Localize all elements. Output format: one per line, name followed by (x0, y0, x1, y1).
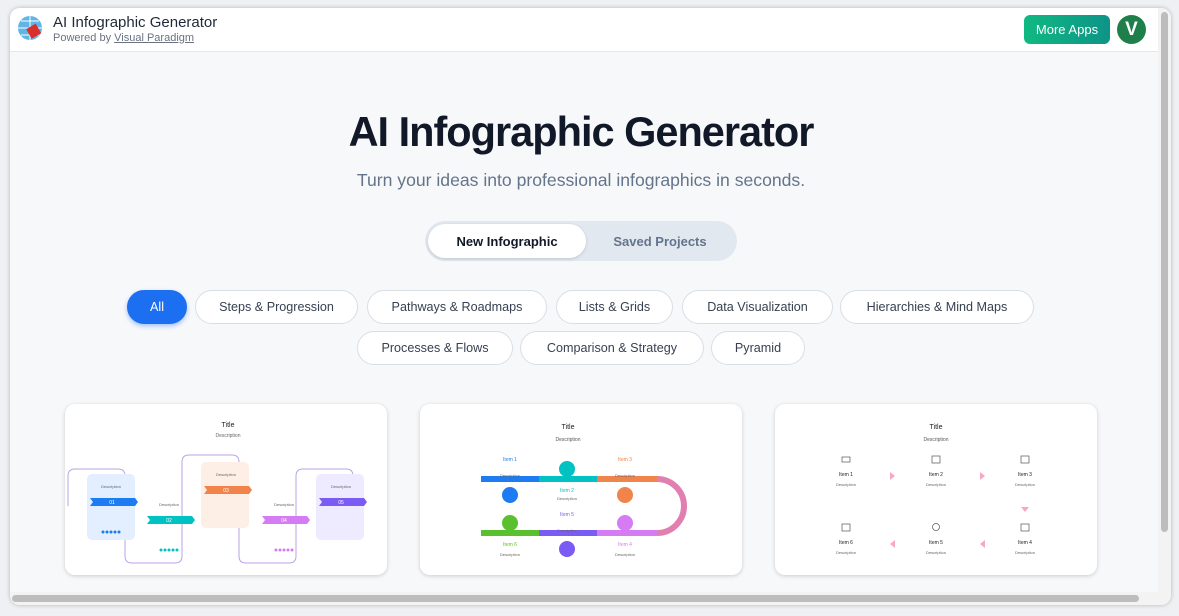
card: steps template: Description (159, 502, 179, 507)
card: flow grid template: Title (930, 424, 943, 431)
category chips: Pyramid (735, 341, 781, 355)
card: steps template: Description (216, 472, 236, 477)
category chips: Hierarchies & Mind Maps (867, 300, 1007, 314)
powered by: Powered by Visual Paradigm (53, 32, 194, 44)
category chips: Data Visualization (707, 300, 808, 314)
category chips: Steps & Progression (219, 300, 334, 314)
card: flow grid template: Item 1 (839, 472, 853, 478)
card: flow grid template: Item 2 (929, 472, 943, 478)
card: flow grid template: Item 5 (929, 540, 943, 546)
card: roadmap template: Item 2 (560, 488, 574, 494)
card: roadmap template: Item 1 (503, 457, 517, 463)
category chips: Lists & Grids (579, 300, 650, 314)
card: flow grid template: Description (926, 550, 946, 555)
main title: AI Infographic Generator (349, 108, 813, 155)
card: steps template: 02 (166, 518, 172, 524)
more apps button: More Apps (1036, 22, 1098, 37)
card: steps template: Title (222, 422, 235, 429)
icon: logo globe (18, 16, 42, 40)
card: roadmap template: Description (500, 552, 520, 557)
card: roadmap template: Description (615, 473, 635, 478)
card: roadmap template: Item 3 (618, 457, 632, 463)
category chips: Processes & Flows (381, 341, 489, 355)
card: flow grid template: Item 3 (1018, 472, 1032, 478)
card: steps template: Description (101, 484, 121, 489)
card: roadmap template: Title (562, 424, 575, 431)
header bar (10, 8, 1158, 52)
card: steps template (65, 404, 387, 575)
card: steps template: Description (215, 433, 241, 439)
card: flow grid template: Item 4 (1018, 540, 1032, 546)
subtitle: Turn your ideas into professional infographics in seconds. (357, 170, 805, 190)
card: roadmap template: Description (557, 528, 577, 533)
category chips: All (150, 300, 164, 314)
more apps button (1024, 15, 1110, 44)
card: roadmap template: Description (555, 437, 581, 443)
avatar: V (1125, 18, 1138, 40)
card: steps template: Description (331, 484, 351, 489)
card: flow grid template: Item 6 (839, 540, 853, 546)
card: steps template: 01 (109, 500, 115, 506)
tab: saved projects: Saved Projects (613, 234, 707, 248)
tab: new infographic: New Infographic (456, 234, 558, 248)
card: steps template: 03 (223, 488, 229, 494)
card: flow grid template: Description (836, 550, 856, 555)
category chips: Pathways & Roadmaps (392, 300, 522, 314)
card: flow grid template: Description (836, 482, 856, 487)
card: steps template: Description (274, 502, 294, 507)
card: steps template: 05 (338, 500, 344, 506)
card: flow grid template (775, 404, 1097, 575)
avatar (1117, 15, 1146, 44)
card: roadmap template: Item 4 (618, 542, 632, 548)
card: roadmap template: Item 6 (503, 542, 517, 548)
card: roadmap template: Item 5 (560, 512, 574, 518)
scrollbar (1158, 8, 1171, 605)
card: roadmap template: Description (557, 496, 577, 501)
card: roadmap template: Description (615, 552, 635, 557)
card: flow grid template: Description (1015, 482, 1035, 487)
tab: new infographic (428, 224, 586, 258)
toggle tabs (425, 221, 737, 261)
category chips: Comparison & Strategy (547, 341, 677, 355)
card: steps template: 04 (281, 518, 287, 524)
card: flow grid template: Description (1015, 550, 1035, 555)
card: flow grid template: Description (923, 437, 949, 443)
card: flow grid template: Description (926, 482, 946, 487)
card: roadmap template: Description (500, 473, 520, 478)
card: roadmap template (420, 404, 742, 575)
app title: AI Infographic Generator (53, 14, 217, 31)
